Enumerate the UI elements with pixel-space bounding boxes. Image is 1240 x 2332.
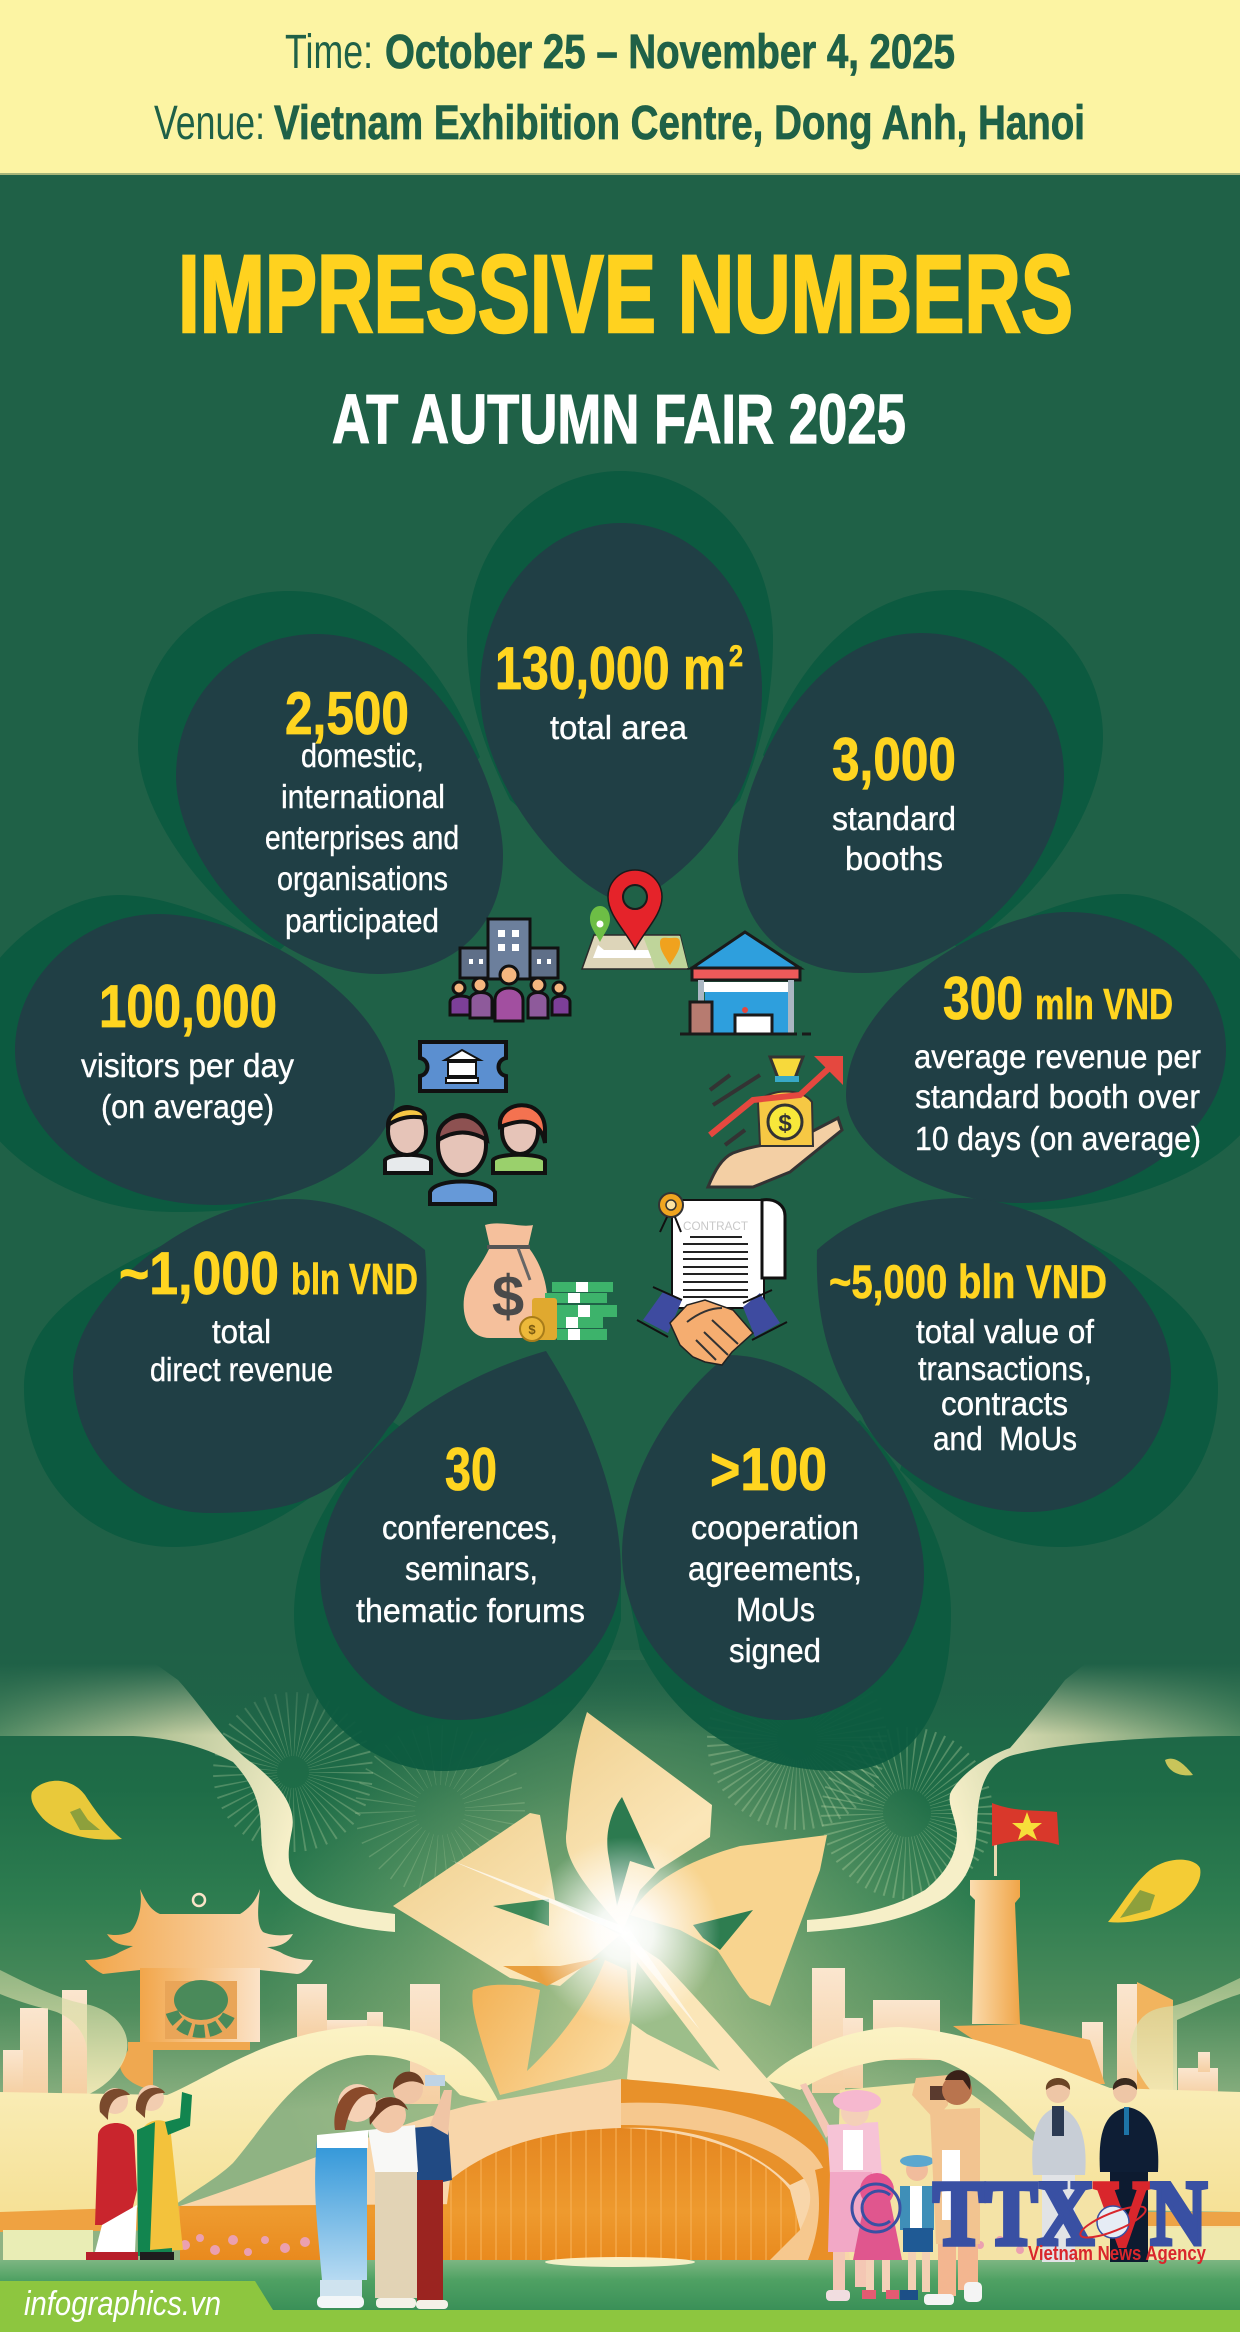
stat: transactions value: contracts bbox=[941, 1385, 1068, 1422]
icon: enterprises and people bbox=[450, 919, 570, 1021]
stat: cooperation agreements: >100 bbox=[710, 1436, 827, 1503]
stat: conferences: conferences, bbox=[382, 1509, 558, 1546]
flower beds bbox=[180, 2234, 1049, 2256]
stat: direct revenue bbox=[119, 1240, 418, 1388]
stat: visitors per day bbox=[81, 973, 294, 1125]
time line: Time: bbox=[285, 26, 373, 79]
stat: conferences: thematic forums bbox=[356, 1592, 585, 1629]
people: family with camera bbox=[800, 2070, 982, 2305]
stat: standard booths bbox=[832, 726, 956, 877]
fireworks bbox=[245, 1685, 962, 1868]
stat: direct revenue: bln VND bbox=[291, 1255, 418, 1304]
ground bbox=[0, 2260, 1240, 2310]
people: selfie group bbox=[315, 2072, 452, 2309]
ribbon right swirl bbox=[1130, 1978, 1240, 2095]
stat: visitors per day: visitors per day bbox=[81, 1047, 294, 1084]
stat: transactions value: transactions, bbox=[918, 1350, 1092, 1387]
venue line: Venue: bbox=[154, 97, 265, 150]
stat: conferences: seminars, bbox=[405, 1550, 538, 1587]
subtitle: AT AUTUMN FAIR 2025 bbox=[332, 380, 906, 458]
stat: standard booths: booths bbox=[845, 840, 943, 877]
illustration: festive scene with star monument bbox=[0, 1650, 1240, 2310]
citadel flag tower bbox=[953, 1803, 1105, 2084]
stat: direct revenue: total bbox=[212, 1313, 271, 1350]
footer credit: infographics.vn bbox=[24, 2285, 221, 2323]
ribbon left swirl bbox=[0, 1970, 127, 2095]
stat: direct revenue: direct revenue bbox=[150, 1351, 333, 1388]
header band bbox=[0, 0, 1240, 175]
people: women in ao dai bbox=[86, 2085, 192, 2260]
leaves bbox=[31, 1759, 1200, 1923]
stat: visitors per day: (on average) bbox=[101, 1088, 274, 1125]
ribbon right upper bbox=[807, 1660, 1240, 1932]
star monument bbox=[393, 1712, 827, 2099]
stat: enterprises bbox=[265, 680, 459, 939]
icon: exhibition booth bbox=[680, 932, 811, 1034]
stat: enterprises: international bbox=[281, 778, 445, 815]
ribbon top fade bbox=[0, 1660, 1240, 1736]
footer band bbox=[0, 2281, 1240, 2332]
exhibition centre building bbox=[0, 2079, 1240, 2260]
stat: average revenue: 10 days (on average) bbox=[915, 1120, 1201, 1157]
icon: money bag and cash: $ bbox=[492, 1264, 524, 1329]
icon: money bag and cash: $ bbox=[528, 1322, 536, 1337]
stat: standard booths: standard bbox=[832, 800, 956, 837]
flower inner dark petals bbox=[15, 523, 1226, 1720]
stat: conferences bbox=[356, 1436, 585, 1629]
icon: money bag and cash bbox=[464, 1223, 617, 1341]
pagoda gate bbox=[85, 1889, 313, 2090]
stat: average revenue: mln VND bbox=[1035, 980, 1173, 1029]
stat: direct revenue: ~1,000 bbox=[119, 1240, 279, 1307]
stat: cooperation agreements: agreements, bbox=[688, 1550, 862, 1587]
icon: revenue in hand bbox=[708, 1056, 843, 1187]
stat: cooperation agreements bbox=[688, 1436, 862, 1669]
stat: average revenue: standard booth over bbox=[915, 1078, 1200, 1115]
stat: transactions value bbox=[829, 1255, 1107, 1457]
stat: transactions value: total value of bbox=[916, 1313, 1095, 1350]
stat: cooperation agreements: signed bbox=[729, 1632, 821, 1669]
stat: transactions value: ~5,000 bln VND bbox=[829, 1255, 1107, 1308]
flower outer petals bbox=[0, 471, 1240, 1771]
stat: total area: 2 bbox=[729, 640, 743, 673]
icon: contract and handshake bbox=[637, 1193, 787, 1365]
stat: transactions value: and MoUs bbox=[933, 1420, 1077, 1457]
stat: total area bbox=[495, 635, 743, 746]
stat: enterprises: domestic, bbox=[301, 737, 424, 774]
icon: revenue in hand: $ bbox=[778, 1110, 792, 1137]
stat: average revenue: average revenue per bbox=[914, 1038, 1201, 1075]
icon: contract and handshake: CONTRACT bbox=[683, 1219, 749, 1233]
stat: total area: total area bbox=[550, 709, 688, 746]
icon: ticket and visitors bbox=[385, 1042, 545, 1204]
stat: cooperation agreements: cooperation bbox=[691, 1509, 859, 1546]
watermark logo: TTXVN Vietnam News Agency: TTXVN bbox=[933, 2162, 1207, 2264]
stat: average revenue: 300 bbox=[943, 965, 1023, 1032]
people: two men in suits bbox=[1032, 2078, 1158, 2262]
cream wave ribbons bbox=[0, 2026, 1240, 2260]
stat: enterprises: organisations bbox=[277, 860, 448, 897]
city buildings bbox=[3, 1968, 1218, 2104]
stat: standard booths: 3,000 bbox=[832, 726, 956, 793]
stat: cooperation agreements: MoUs bbox=[736, 1591, 815, 1628]
stat: visitors per day: 100,000 bbox=[99, 973, 277, 1040]
stat: conferences: 30 bbox=[445, 1436, 497, 1503]
icon: map with location pins bbox=[582, 870, 688, 969]
stat: enterprises: 2,500 bbox=[285, 680, 409, 747]
stat: enterprises: enterprises and bbox=[265, 819, 459, 856]
stat: enterprises: participated bbox=[285, 902, 439, 939]
watermark logo: TTXVN Vietnam News Agency: Vietnam News Agency bbox=[1028, 2243, 1207, 2265]
ribbon left upper bbox=[0, 1660, 395, 1932]
stat: total area: 130,000 m bbox=[495, 635, 726, 702]
time line: October 25 – November 4, 2025 bbox=[385, 26, 955, 79]
stat: average revenue bbox=[914, 965, 1201, 1157]
